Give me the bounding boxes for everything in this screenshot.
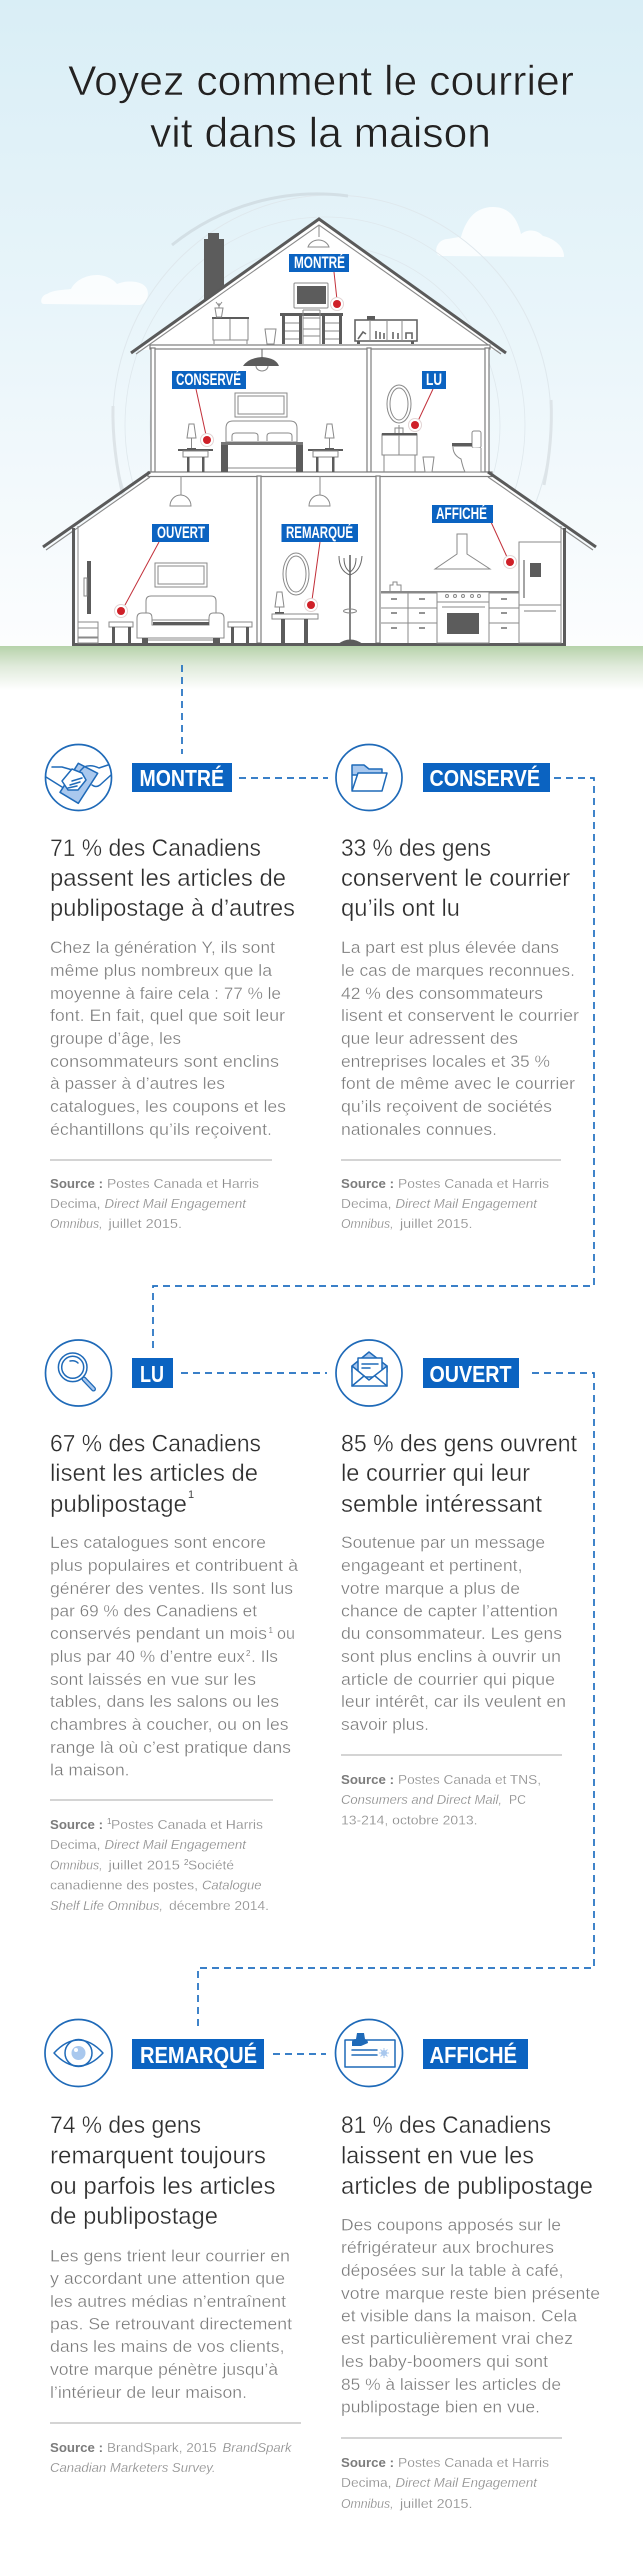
source: Société <box>188 1858 234 1872</box>
bedroom pendant lamp <box>243 349 279 371</box>
chimney <box>204 233 224 300</box>
title <box>68 57 574 156</box>
heading: laissent en vue les <box>341 2142 534 2170</box>
background: sky <box>0 0 643 647</box>
heading: le courrier qui leur <box>341 1460 530 1487</box>
second floor walls <box>148 348 492 476</box>
heading: lisent les articles de <box>50 1460 258 1487</box>
source: canadienne des postes, <box>50 1878 198 1892</box>
body text: plus populaires et contribuent à <box>50 1557 299 1575</box>
range hood <box>435 534 490 569</box>
connector <box>273 2053 326 2055</box>
body text: est particulièrement vrai chez <box>341 2330 573 2348</box>
body text <box>341 939 580 1139</box>
entry lamp <box>309 476 330 506</box>
body text: ou <box>277 1625 295 1643</box>
heading: semble intéressant <box>341 1491 542 1518</box>
body text: à passer à d’autres les <box>50 1075 225 1093</box>
source: Direct Mail Engagement <box>396 1196 538 1211</box>
heading <box>341 2112 593 2200</box>
heading <box>50 2112 276 2230</box>
kitchen cabinets <box>381 582 519 643</box>
source: Source : <box>50 1176 103 1191</box>
body text: leur intérêt, car ils veulent en <box>341 1693 566 1711</box>
attic desk <box>280 310 343 344</box>
heading: 33 % des gens <box>341 835 491 862</box>
title: vit dans la maison <box>150 109 491 156</box>
section: conservé <box>153 744 594 1350</box>
heading: remarquent toujours <box>50 2142 266 2170</box>
marker: conservé: CONSERVÉ <box>176 370 241 389</box>
connector <box>181 1372 327 1374</box>
body text: par 69 % des Canadiens et <box>50 1602 257 1620</box>
entry table with lamp <box>272 592 318 643</box>
body text: moyenne à faire cela : 77 % le <box>50 985 281 1003</box>
source: Direct Mail Engagement <box>104 1837 247 1852</box>
source: Decima, <box>50 1837 100 1852</box>
marker: lu <box>408 371 446 432</box>
heading <box>341 835 570 922</box>
source: Source : <box>341 1176 394 1191</box>
source: Omnibus, <box>341 1216 394 1231</box>
sofa <box>137 596 224 643</box>
heading <box>50 1430 261 1518</box>
source <box>50 1176 259 1231</box>
body text: et visible dans la maison. Cela <box>341 2308 578 2326</box>
body text: sont plus enclins à ouvrir un <box>341 1648 561 1666</box>
source: Decima, <box>341 2475 392 2490</box>
body text: publipostage bien en vue. <box>341 2398 540 2416</box>
marker: lu: LU <box>426 371 442 389</box>
body text: chambres à coucher, ou on les <box>50 1716 288 1734</box>
bedroom nightstand right <box>308 424 343 472</box>
section: remarqué <box>45 2020 326 2475</box>
source: juillet 2015. <box>399 1216 472 1231</box>
body text: la maison. <box>50 1762 130 1780</box>
icon: open envelope <box>336 1340 402 1406</box>
source: Catalogue <box>202 1878 262 1892</box>
label: affiché: AFFICHÉ <box>430 2041 517 2068</box>
title: Voyez comment le courrier <box>68 57 574 104</box>
body text: 85 % à laisser les articles de <box>341 2376 561 2394</box>
source: 1 <box>107 1817 112 1826</box>
label: lu <box>132 1358 173 1388</box>
fridge with coupon <box>519 542 561 643</box>
body text: range là où c’est pratique dans <box>50 1739 291 1757</box>
icon: hands passing mail <box>46 744 112 810</box>
bathroom mirror <box>387 385 411 423</box>
icon: folder <box>336 744 402 810</box>
heading: articles de publipostage <box>341 2173 593 2200</box>
source <box>341 1176 549 1231</box>
body text: 1 <box>268 1626 274 1635</box>
heading: publipostage <box>50 1491 187 1518</box>
marker: remarqué: REMARQUÉ <box>286 523 353 542</box>
attic monitor <box>294 283 328 308</box>
bed <box>221 421 303 472</box>
body text: réfrigérateur aux brochures <box>341 2239 554 2257</box>
source: Decima, <box>341 1196 392 1211</box>
body text: plus par 40 % d’entre eux <box>50 1648 245 1666</box>
body text <box>341 1534 566 1734</box>
source <box>50 2440 293 2475</box>
source: Source : <box>50 2440 103 2455</box>
body text <box>341 2216 600 2416</box>
side table right <box>228 622 252 643</box>
heading: conservent le courrier <box>341 865 570 892</box>
marker: ouvert <box>114 524 209 618</box>
marker: conservé <box>172 370 246 446</box>
television <box>78 561 98 643</box>
body text: article de courrier qui pique <box>341 1671 555 1689</box>
body text: nationales connues. <box>341 1121 497 1139</box>
body text: générer des ventes. Ils sont lus <box>50 1580 293 1598</box>
body text: les baby-boomers qui sont <box>341 2353 549 2371</box>
body text: du consommateur. Les gens <box>341 1625 562 1643</box>
icon: eye <box>45 2020 112 2086</box>
body text: votre marque a plus de <box>341 1580 520 1598</box>
body text: dans les mains de vos clients, <box>50 2338 284 2356</box>
section: lu <box>46 1340 327 1913</box>
body text: qu’ils reçoivent de sociétés <box>341 1098 552 1116</box>
heading: passent les articles de <box>50 865 286 892</box>
source: Direct Mail Engagement <box>104 1196 247 1211</box>
marker: remarqué <box>282 523 358 612</box>
body text: font de même avec le courrier <box>341 1075 576 1093</box>
label: ouvert: OUVERT <box>430 1361 512 1387</box>
house illustration <box>43 219 596 646</box>
heading: 81 % des Canadiens <box>341 2112 551 2139</box>
heading: 1 <box>188 1489 194 1501</box>
body text: conservés pendant un mois <box>50 1625 267 1643</box>
source: Canadian Marketers Survey. <box>50 2460 216 2475</box>
section: montré <box>46 744 328 1231</box>
attic sideboard and vase <box>212 302 249 344</box>
body text <box>50 2248 293 2402</box>
heading: 74 % des gens <box>50 2112 201 2139</box>
body text: consommateurs sont enclins <box>50 1053 279 1071</box>
heading: publipostage à d’autres <box>50 895 295 922</box>
connector <box>239 777 328 779</box>
body text: font. En fait, quel que soit leur <box>50 1007 286 1025</box>
source: juillet 2015 <box>107 1858 180 1872</box>
body text: Des coupons apposés sur le <box>341 2216 561 2234</box>
source: Postes Canada et Harris <box>398 1176 549 1191</box>
body text: Soutenue par un message <box>341 1534 545 1552</box>
source: Shelf Life Omnibus, <box>50 1898 163 1913</box>
body text: 2 <box>246 1649 251 1658</box>
body text: déposées sur la table à café, <box>341 2262 564 2280</box>
source: décembre 2014. <box>169 1898 269 1913</box>
source: Postes Canada et Harris <box>107 1176 259 1191</box>
source: Omnibus, <box>50 1858 102 1872</box>
attic trash <box>265 329 276 344</box>
heading: qu’ils ont lu <box>341 895 460 922</box>
body text: tables, dans les salons ou les <box>50 1693 279 1711</box>
source: Consumers and Direct Mail, <box>341 1792 502 1807</box>
icon: magnifying glass <box>46 1340 112 1406</box>
source: PC <box>509 1792 526 1807</box>
body text: savoir plus. <box>341 1716 429 1734</box>
lower roof <box>43 472 596 550</box>
body text: groupe d’âge, les <box>50 1030 181 1048</box>
body text: les autres médias n’entraînent <box>50 2293 287 2311</box>
body text: lisent et conservent le courrier <box>341 1007 580 1025</box>
heading: ou parfois les articles <box>50 2173 276 2200</box>
connector: conservé to lu <box>153 778 594 1350</box>
attic floor <box>150 345 490 349</box>
body text: échantillons qu’ils reçoivent. <box>50 1121 272 1139</box>
body text <box>50 939 286 1139</box>
marker: montré: MONTRÉ <box>294 253 345 272</box>
source: Omnibus, <box>341 2496 394 2511</box>
body text: votre marque reste bien présente <box>341 2285 600 2303</box>
label: conservé: CONSERVÉ <box>430 764 540 791</box>
icon: coupon card <box>336 2020 402 2086</box>
coat rack <box>338 555 363 644</box>
source: juillet 2015. <box>107 1216 182 1231</box>
bedroom nightstand left <box>178 424 213 472</box>
source: Source : <box>341 2455 394 2470</box>
source <box>50 1817 269 1913</box>
body text: 42 % des consommateurs <box>341 985 543 1003</box>
marker: affiché <box>432 504 516 568</box>
body text: y accordant une attention que <box>50 2270 285 2288</box>
attic roof <box>131 219 506 354</box>
source: Postes Canada et TNS, <box>398 1772 541 1787</box>
body text: entreprises locales et 35 % <box>341 1053 550 1071</box>
source: Postes Canada et Harris <box>398 2455 549 2470</box>
source <box>341 1772 541 1828</box>
body text: Les gens trient leur courrier en <box>50 2248 290 2266</box>
heading: 67 % des Canadiens <box>50 1430 261 1458</box>
source: juillet 2015. <box>399 2496 472 2511</box>
source: 2 <box>184 1858 189 1867</box>
connector: ouvert to remarqué <box>198 1373 594 2029</box>
toilet <box>452 431 481 472</box>
bedroom picture <box>235 393 287 417</box>
attic lamp <box>308 226 329 247</box>
source: Decima, <box>50 1196 100 1211</box>
source: Source : <box>50 1817 103 1832</box>
stove <box>437 592 489 643</box>
source: 13-214, octobre 2013. <box>341 1812 478 1828</box>
bathroom vanity <box>382 425 417 472</box>
heading <box>341 1430 577 1518</box>
source: BrandSpark <box>222 2440 293 2455</box>
source: BrandSpark, 2015 <box>107 2440 216 2455</box>
side table left <box>109 622 133 643</box>
body text: pas. Se retrouvant directement <box>50 2316 293 2334</box>
body text: engageant et pertinent, <box>341 1557 522 1575</box>
marker: ouvert: OUVERT <box>157 524 205 542</box>
living room picture <box>155 563 207 587</box>
living room lamp <box>170 476 191 506</box>
background: ground <box>0 646 643 690</box>
lower walls <box>72 476 566 646</box>
source <box>341 2455 549 2511</box>
cloud: right <box>436 207 564 257</box>
body text: le cas de marques reconnues. <box>341 962 575 980</box>
label: lu: LU <box>140 1361 164 1387</box>
cloud: left <box>41 275 148 305</box>
marker: affiché: AFFICHÉ <box>436 504 487 523</box>
body text: même plus nombreux que la <box>50 962 273 980</box>
source: Omnibus, <box>50 1216 102 1231</box>
label: montré: MONTRÉ <box>140 764 224 791</box>
marker: montré <box>289 253 349 310</box>
body text: Chez la génération Y, ils sont <box>50 939 276 957</box>
body text: Les catalogues sont encore <box>50 1534 266 1552</box>
body text: l’intérieur de leur maison. <box>50 2384 247 2402</box>
heading: de publipostage <box>50 2203 218 2230</box>
connector: house to montré <box>181 665 183 754</box>
house body fill <box>76 219 564 645</box>
label: remarqué: REMARQUÉ <box>140 2041 257 2068</box>
attic shelf <box>355 316 417 344</box>
source: Source : <box>341 1772 394 1787</box>
body text: La part est plus élevée dans <box>341 939 559 957</box>
source: Postes Canada et Harris <box>111 1817 263 1832</box>
body text: votre marque pénètre jusqu’à <box>50 2361 279 2379</box>
body text: . Ils <box>251 1648 278 1666</box>
body text: que leur adressent des <box>341 1030 518 1048</box>
body text <box>50 1534 299 1780</box>
heading: 71 % des Canadiens <box>50 835 261 862</box>
bathroom trash <box>423 457 434 472</box>
entry mirror <box>283 553 309 595</box>
body text: catalogues, les coupons et les <box>50 1098 286 1116</box>
heading <box>50 835 295 922</box>
section: ouvert <box>198 1340 594 2029</box>
heading: 85 % des gens ouvrent <box>341 1430 577 1458</box>
body text: chance de capter l’attention <box>341 1602 558 1620</box>
section: affiché <box>336 2020 600 2511</box>
source: Direct Mail Engagement <box>396 2475 538 2490</box>
body text: sont laissés en vue sur les <box>50 1671 256 1689</box>
